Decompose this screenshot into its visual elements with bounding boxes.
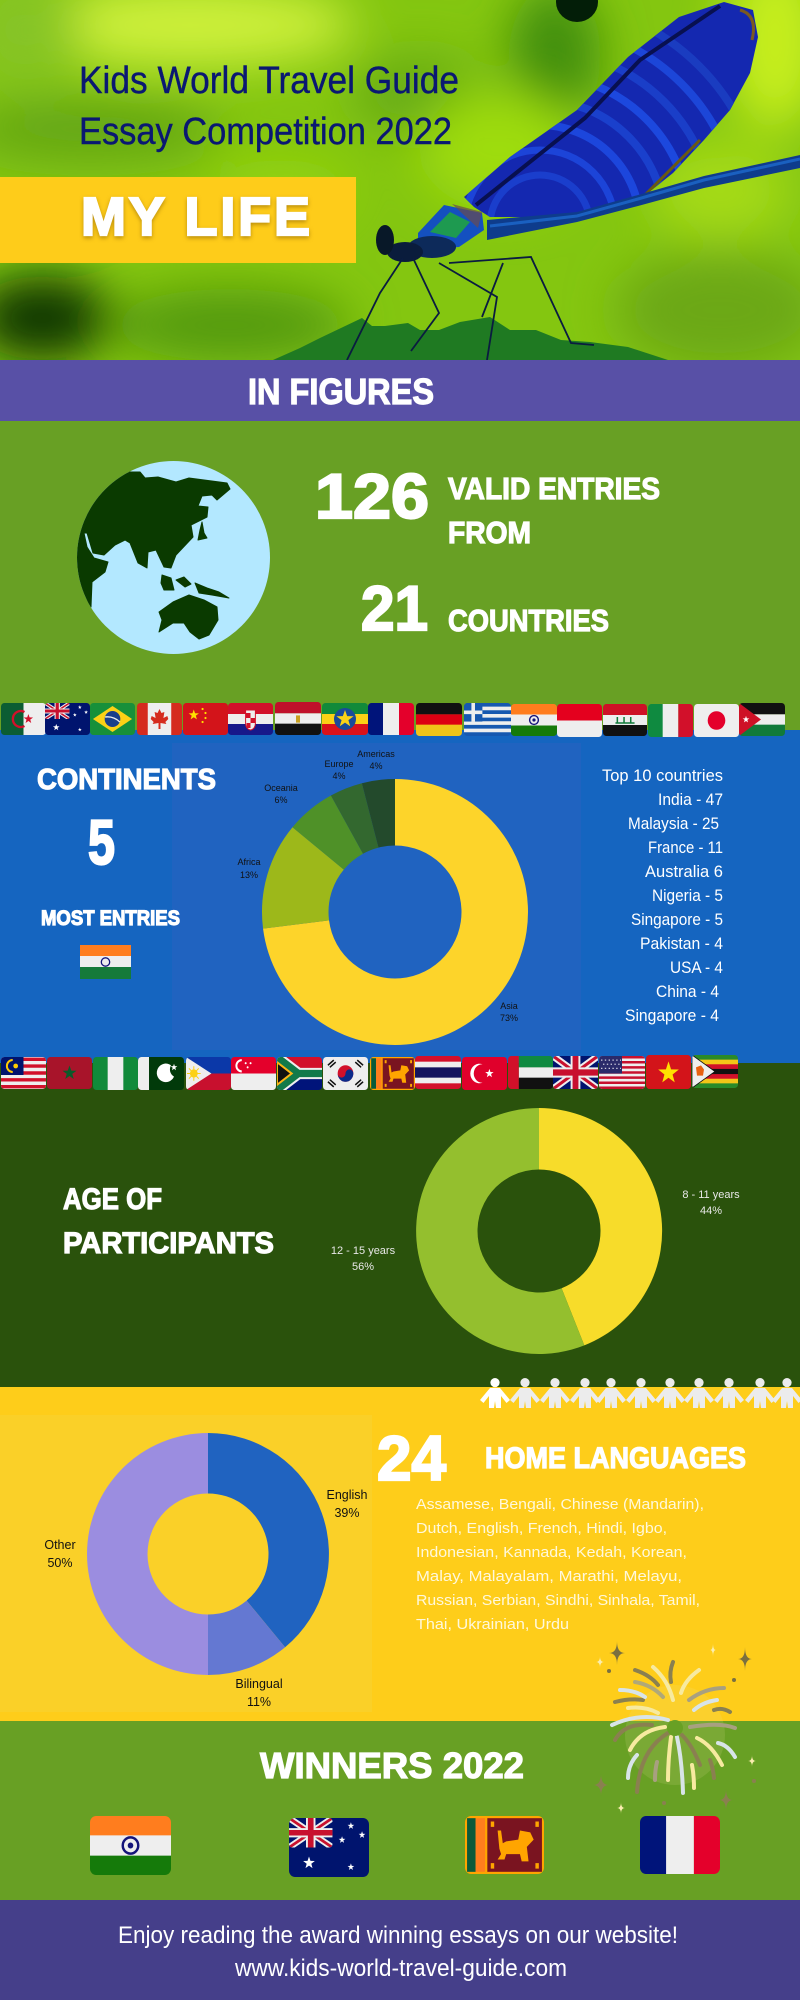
donut chart: age groups: 12 - 15 years — [331, 1245, 396, 1257]
donut chart: entries by continent: 4% — [369, 761, 383, 771]
panel: continents — [0, 730, 800, 1063]
hero title — [79, 60, 459, 153]
donut chart: entries by continent: Oceania — [264, 783, 298, 793]
donut chart: entries by continent: Europe — [324, 759, 354, 769]
donut chart: entries by continent: 13% — [240, 870, 258, 880]
icon: globe — [60, 461, 270, 654]
donut chart: home language: English — [326, 1488, 368, 1502]
panel: winners — [0, 1721, 800, 1900]
stat: 126 valid entries from: VALID ENTRIES — [448, 471, 660, 506]
top 10 countries list: Malaysia - 25 — [628, 814, 719, 833]
continents heading and count: 5 — [88, 808, 115, 878]
stat: 21 countries: COUNTRIES — [448, 603, 609, 638]
top 10 countries list: Singapore - 4 — [625, 1006, 719, 1025]
donut chart: entries by continent: Africa — [237, 857, 261, 867]
flag row: first half of countries — [1, 702, 785, 737]
donut chart: home language: 39% — [334, 1506, 360, 1520]
band: in figures: IN FIGURES — [248, 371, 434, 412]
hero background: blurred green foliage — [0, 0, 800, 370]
list of languages: Assamese, Bengali, Chinese (Mandarin), — [416, 1496, 704, 1513]
most entries with india flag: MOST ENTRIES — [41, 907, 180, 930]
hero title: Essay Competition 2022 — [79, 111, 452, 153]
list of languages: Malay, Malayalam, Marathi, Melayu, — [416, 1568, 682, 1585]
stat: 126 valid entries from: FROM — [448, 515, 531, 550]
donut chart: entries by continent: 4% — [332, 771, 346, 781]
top 10 countries list: China - 4 — [656, 982, 719, 1001]
people paper chain — [480, 1378, 800, 1408]
donut chart: entries by continent: 6% — [274, 795, 288, 805]
stat: 24 home languages — [377, 1424, 746, 1494]
icon: fireworks — [612, 1662, 735, 1793]
panel: footer call to action — [0, 1900, 800, 2000]
donut chart: entries by continent — [237, 749, 528, 1045]
top 10 countries list: Top 10 countries — [602, 766, 723, 785]
list of languages: Russian, Serbian, Sindhi, Sinhala, Tamil, — [416, 1592, 700, 1609]
donut chart: entries by continent: Asia — [500, 1001, 518, 1011]
top 10 countries list: USA - 4 — [670, 958, 723, 977]
flag: australia — [289, 1818, 369, 1877]
stat: 21 countries — [361, 574, 609, 644]
donut chart: age groups: 44% — [700, 1205, 722, 1217]
donut chart: age groups: 8 - 11 years — [682, 1189, 740, 1201]
flag: france — [640, 1816, 720, 1874]
panel: hero photo — [0, 0, 800, 360]
list of languages — [416, 1496, 704, 1633]
donut chart: home language: Other — [44, 1538, 76, 1552]
panel: entries and countries — [0, 421, 800, 731]
stat: 21 countries: 21 — [361, 574, 428, 644]
winners heading: WINNERS 2022 — [260, 1745, 524, 1786]
top 10 countries list: Nigeria - 5 — [652, 886, 723, 905]
most entries with india flag — [41, 907, 180, 979]
donut chart: entries by continent: Americas — [357, 749, 395, 759]
stat: 126 valid entries from — [315, 462, 660, 550]
panel: home languages — [0, 1387, 800, 1721]
top 10 countries list: Singapore - 5 — [631, 910, 723, 929]
donut chart: age groups — [331, 1108, 740, 1354]
top 10 countries list: Pakistan - 4 — [640, 934, 723, 953]
donut chart: age groups: 56% — [352, 1261, 374, 1273]
donut chart: entries by continent: 73% — [500, 1013, 518, 1023]
stat: 24 home languages: HOME LANGUAGES — [485, 1442, 746, 1475]
age heading — [63, 1183, 274, 1260]
top 10 countries list — [602, 766, 723, 1025]
banner: my life — [0, 177, 356, 263]
top 10 countries list: India - 47 — [658, 790, 723, 809]
donut chart: home language: 11% — [247, 1695, 271, 1709]
list of languages: Indonesian, Kannada, Kedah, Korean, — [416, 1544, 687, 1561]
top 10 countries list: Australia 6 — [645, 862, 723, 881]
stat: 24 home languages: 24 — [377, 1424, 446, 1494]
panel: footer call to action: www.kids-world-travel-guide.com — [234, 1955, 567, 1982]
list of languages: Thai, Ukrainian, Urdu — [416, 1616, 569, 1633]
age heading: AGE OF — [63, 1183, 162, 1216]
list of languages: Dutch, English, French, Hindi, Igbo, — [416, 1520, 667, 1537]
hero title: Kids World Travel Guide — [79, 60, 459, 102]
dragonfly — [346, 2, 800, 360]
donut chart: home language — [44, 1433, 368, 1709]
banner: my life: MY LIFE — [81, 187, 310, 247]
age heading: PARTICIPANTS — [63, 1227, 274, 1260]
donut chart: home language: Bilingual — [235, 1677, 283, 1691]
continents heading and count — [37, 764, 216, 878]
flag: sri lanka — [465, 1816, 544, 1874]
leaf — [273, 317, 668, 360]
flag row: second half of countries — [1, 1055, 738, 1090]
top 10 countries list: France - 11 — [648, 838, 723, 857]
donut chart: home language: 50% — [47, 1556, 73, 1570]
continents heading and count: CONTINENTS — [37, 764, 216, 796]
band: in figures — [0, 360, 800, 421]
stat: 126 valid entries from: 126 — [315, 462, 429, 532]
panel: age of participants — [0, 1063, 800, 1387]
flag: india — [90, 1816, 171, 1875]
panel: footer call to action: Enjoy reading the award winning essays on our website! — [118, 1922, 678, 1949]
sparkles around fireworks — [593, 1641, 756, 1814]
